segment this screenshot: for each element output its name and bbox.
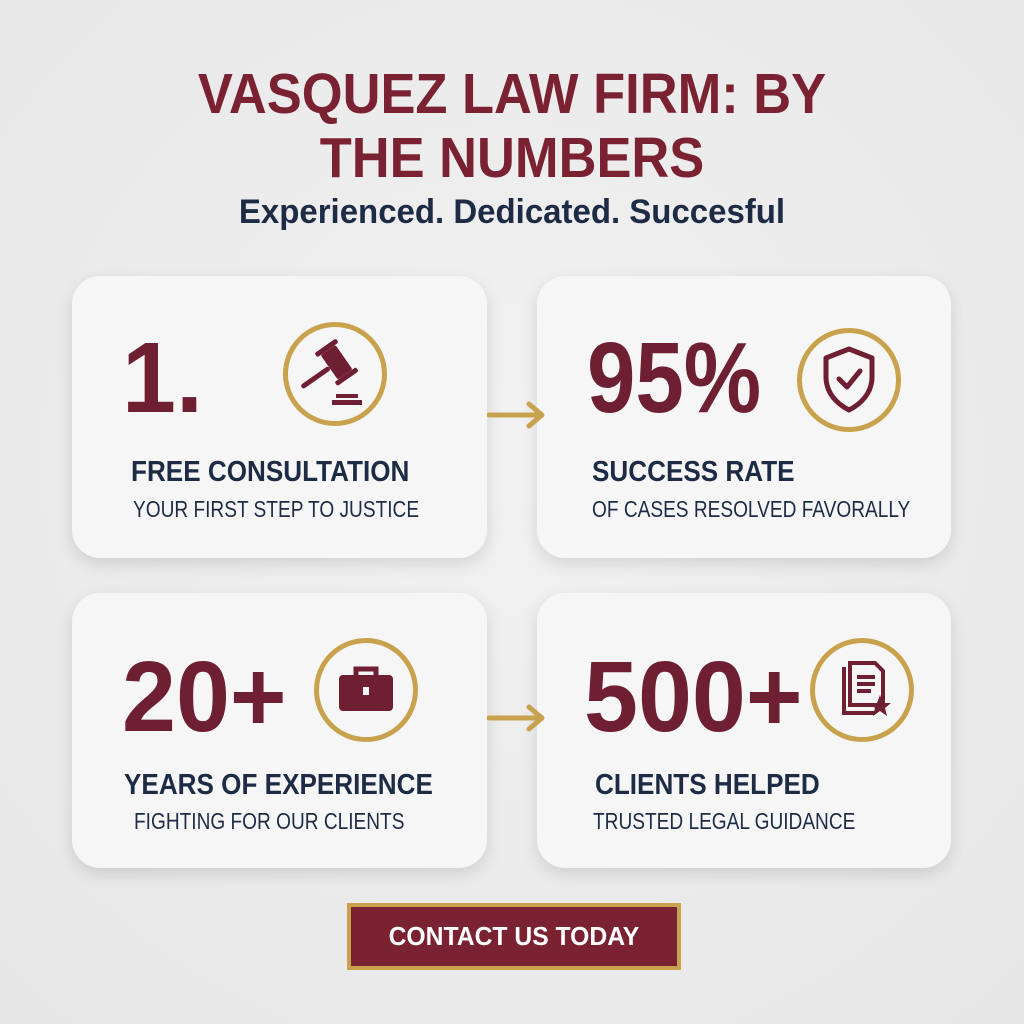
number 95%: 95%	[587, 322, 761, 434]
icon: briefcase	[314, 638, 418, 742]
text: TRUSTED LEGAL GUIDANCE	[593, 808, 855, 834]
icon: gavel	[283, 322, 387, 426]
title: THE NUMBERS	[320, 126, 704, 190]
heading: SUCCESS RATE	[592, 456, 795, 488]
subtitle: Experienced. Dedicated. Succesful	[239, 193, 785, 231]
heading: YEARS OF EXPERIENCE	[124, 769, 433, 801]
panel: years of experience	[72, 593, 487, 868]
panel: clients helped	[537, 593, 951, 868]
arrow 1	[487, 402, 544, 428]
panel: free consultation	[72, 276, 487, 558]
button: contact us	[347, 903, 681, 970]
icon: document star	[810, 638, 914, 742]
heading: CLIENTS HELPED	[595, 769, 820, 801]
number 1: 1.	[122, 322, 203, 434]
title	[198, 62, 826, 190]
number 20+: 20+	[122, 641, 287, 753]
icon: shield	[797, 328, 901, 432]
number 500+: 500+	[584, 641, 802, 753]
arrow 2	[487, 704, 544, 732]
text: OF CASES RESOLVED FAVORALLY	[592, 496, 910, 522]
text: YOUR FIRST STEP TO JUSTICE	[133, 496, 419, 522]
panel: success rate	[537, 276, 951, 558]
title: VASQUEZ LAW FIRM: BY	[198, 62, 826, 126]
text: FIGHTING FOR OUR CLIENTS	[134, 808, 404, 834]
heading: FREE CONSULTATION	[131, 456, 409, 488]
button: contact us: CONTACT US TODAY	[389, 921, 639, 951]
